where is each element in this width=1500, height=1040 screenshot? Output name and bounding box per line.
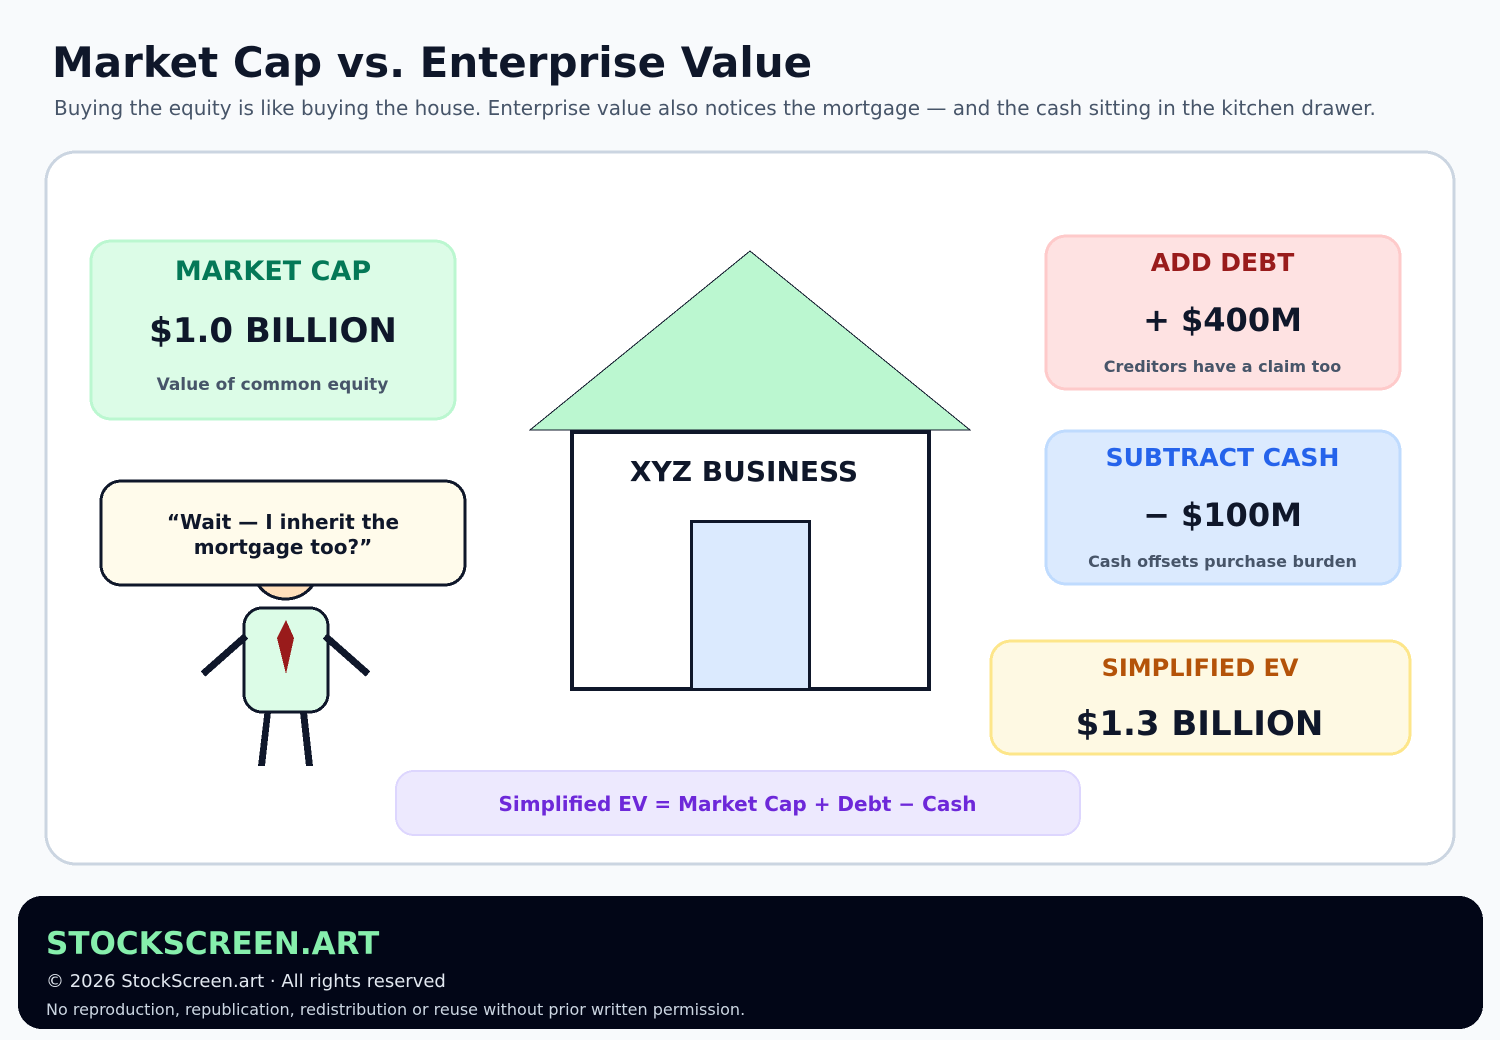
debt value: + $400M xyxy=(1143,301,1302,339)
permission notice: No reproduction, republication, redistribution or reuse without prior written permission. xyxy=(46,1000,745,1019)
cash value: − $100M xyxy=(1143,496,1302,534)
head xyxy=(252,531,320,599)
figure: investor xyxy=(203,531,368,766)
house body xyxy=(572,432,929,689)
subtitle: Buying the equity is like buying the house. Enterprise value also notices the mortgage — and the cash sitting in the kitchen drawer. xyxy=(54,96,1376,120)
brand: STOCKSCREEN.ART xyxy=(46,926,379,962)
debt heading: ADD DEBT xyxy=(1151,248,1294,277)
cash heading: SUBTRACT CASH xyxy=(1106,443,1339,472)
roof xyxy=(530,251,970,430)
footer xyxy=(18,896,1483,1029)
door xyxy=(692,522,810,690)
market cap heading: MARKET CAP xyxy=(175,256,371,287)
torso xyxy=(244,608,328,712)
card: add debt xyxy=(1046,236,1400,389)
speech bubble: mortgage too?” xyxy=(194,535,372,559)
speech bubble xyxy=(101,481,465,585)
main panel xyxy=(46,152,1454,864)
house label: XYZ BUSINESS xyxy=(630,455,858,488)
copyright: © 2026 StockScreen.art · All rights reserved xyxy=(46,971,446,992)
title: Market Cap vs. Enterprise Value xyxy=(52,38,812,87)
legs xyxy=(258,712,313,766)
house illustration xyxy=(530,251,970,690)
arms xyxy=(203,636,368,674)
card: subtract cash xyxy=(1046,431,1400,584)
cash note: Cash offsets purchase burden xyxy=(1088,552,1357,571)
formula text: Simplified EV = Market Cap + Debt − Cash xyxy=(499,792,976,816)
card: market cap xyxy=(91,241,455,419)
formula bar xyxy=(396,771,1080,835)
debt note: Creditors have a claim too xyxy=(1104,357,1341,376)
EV value: $1.3 BILLION xyxy=(1076,704,1323,744)
EV heading: SIMPLIFIED EV xyxy=(1102,654,1299,682)
tie xyxy=(277,620,294,674)
market cap value: $1.0 BILLION xyxy=(149,311,397,351)
market cap note: Value of common equity xyxy=(157,375,388,395)
speech text: “Wait — I inherit the xyxy=(167,510,399,534)
card: simplified EV xyxy=(991,641,1410,754)
